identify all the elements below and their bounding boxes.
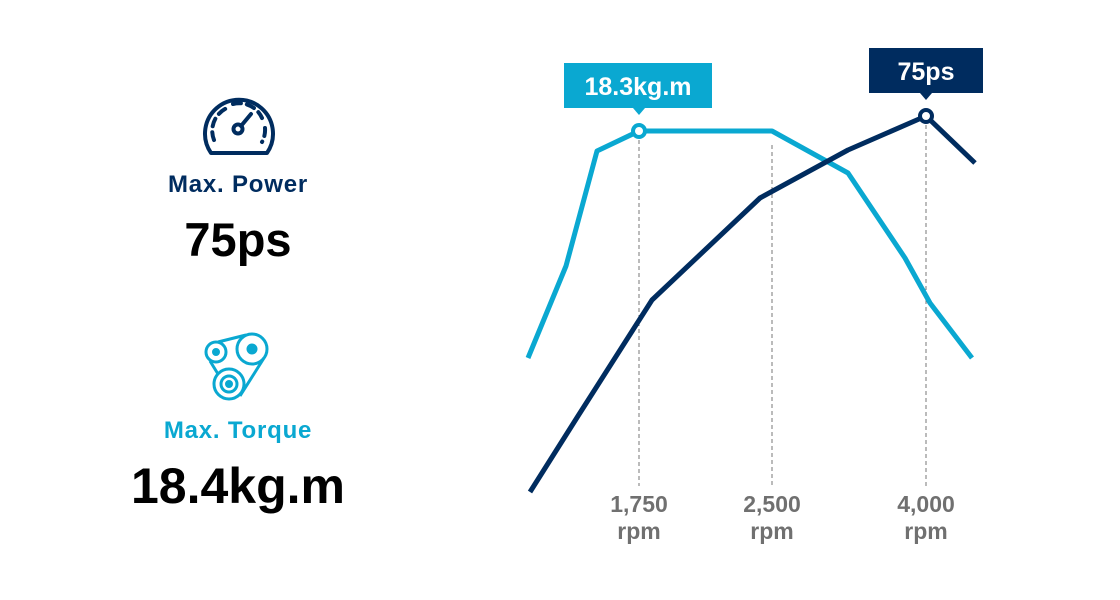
axis labels: rpm bbox=[904, 518, 948, 544]
axis labels: 2,500 bbox=[743, 491, 801, 517]
axis labels: 1,750 bbox=[610, 491, 668, 517]
value: 75ps: 75ps bbox=[184, 213, 292, 266]
callout: 75ps bbox=[869, 48, 983, 100]
value: 18.4kg.m: 18.4kg.m bbox=[131, 458, 345, 514]
power line bbox=[530, 116, 975, 492]
axis labels bbox=[610, 491, 955, 544]
heading: Max. Power: Max. Power bbox=[168, 171, 308, 198]
axis labels: 4,000 bbox=[897, 491, 955, 517]
axis labels: rpm bbox=[750, 518, 794, 544]
torque line bbox=[528, 131, 972, 358]
icon: pulleys bbox=[206, 334, 267, 399]
callout: 75ps: 75ps bbox=[898, 58, 954, 86]
callout: 18.3kg.m bbox=[564, 63, 712, 115]
heading: Max. Torque: Max. Torque bbox=[164, 417, 312, 444]
axis labels: rpm bbox=[617, 518, 661, 544]
icon: speedometer bbox=[205, 100, 273, 153]
chart: power and torque curves bbox=[528, 48, 983, 544]
callout: 18.3kg.m: 18.3kg.m bbox=[584, 73, 692, 101]
